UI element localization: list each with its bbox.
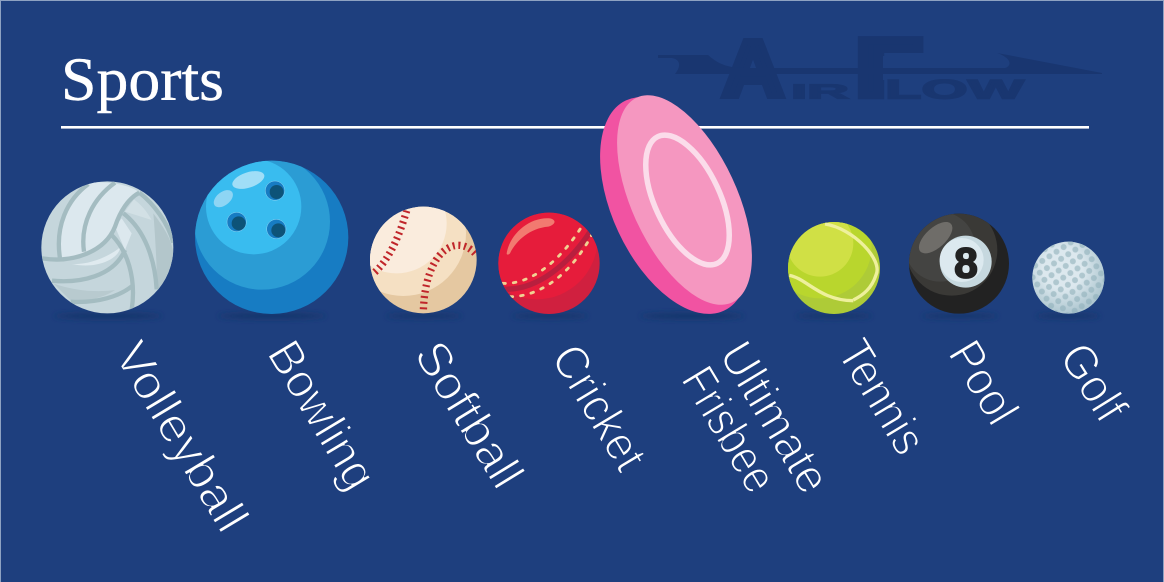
icon: bowling ball xyxy=(194,154,348,314)
icon: cricket ball xyxy=(498,212,600,314)
logo: AirFlow watermark: LOW xyxy=(885,74,1025,104)
logo: AirFlow watermark: F xyxy=(856,23,922,112)
label: Cricket: Cricket xyxy=(541,335,657,480)
ground shadows xyxy=(54,313,1100,319)
icon: softball xyxy=(370,206,477,314)
logo: AirFlow watermark: IR xyxy=(791,81,851,103)
label: Volleyball: Volleyball xyxy=(104,332,258,541)
icon: golf ball xyxy=(1032,242,1104,314)
label: Frisbee: Frisbee xyxy=(671,357,787,502)
logo: AirFlow watermark: A xyxy=(722,24,784,113)
label: Pool: Pool xyxy=(938,331,1028,434)
label: Tennis: Tennis xyxy=(827,330,936,464)
icon: volleyball xyxy=(41,181,174,313)
icon: pool eight ball: 8 xyxy=(954,239,978,287)
icon: pool eight ball xyxy=(909,214,1009,314)
icon: ultimate frisbee disc xyxy=(569,74,781,337)
label: Golf: Golf xyxy=(1049,334,1137,432)
label: Bowling: Bowling xyxy=(257,331,386,499)
label: Ultimate: Ultimate xyxy=(709,332,840,503)
icon: tennis ball xyxy=(788,222,880,314)
title: Sports xyxy=(61,47,224,114)
label: Softball: Softball xyxy=(404,332,533,498)
logo: AirFlow watermark xyxy=(658,23,1102,113)
heading rule xyxy=(61,126,1089,129)
